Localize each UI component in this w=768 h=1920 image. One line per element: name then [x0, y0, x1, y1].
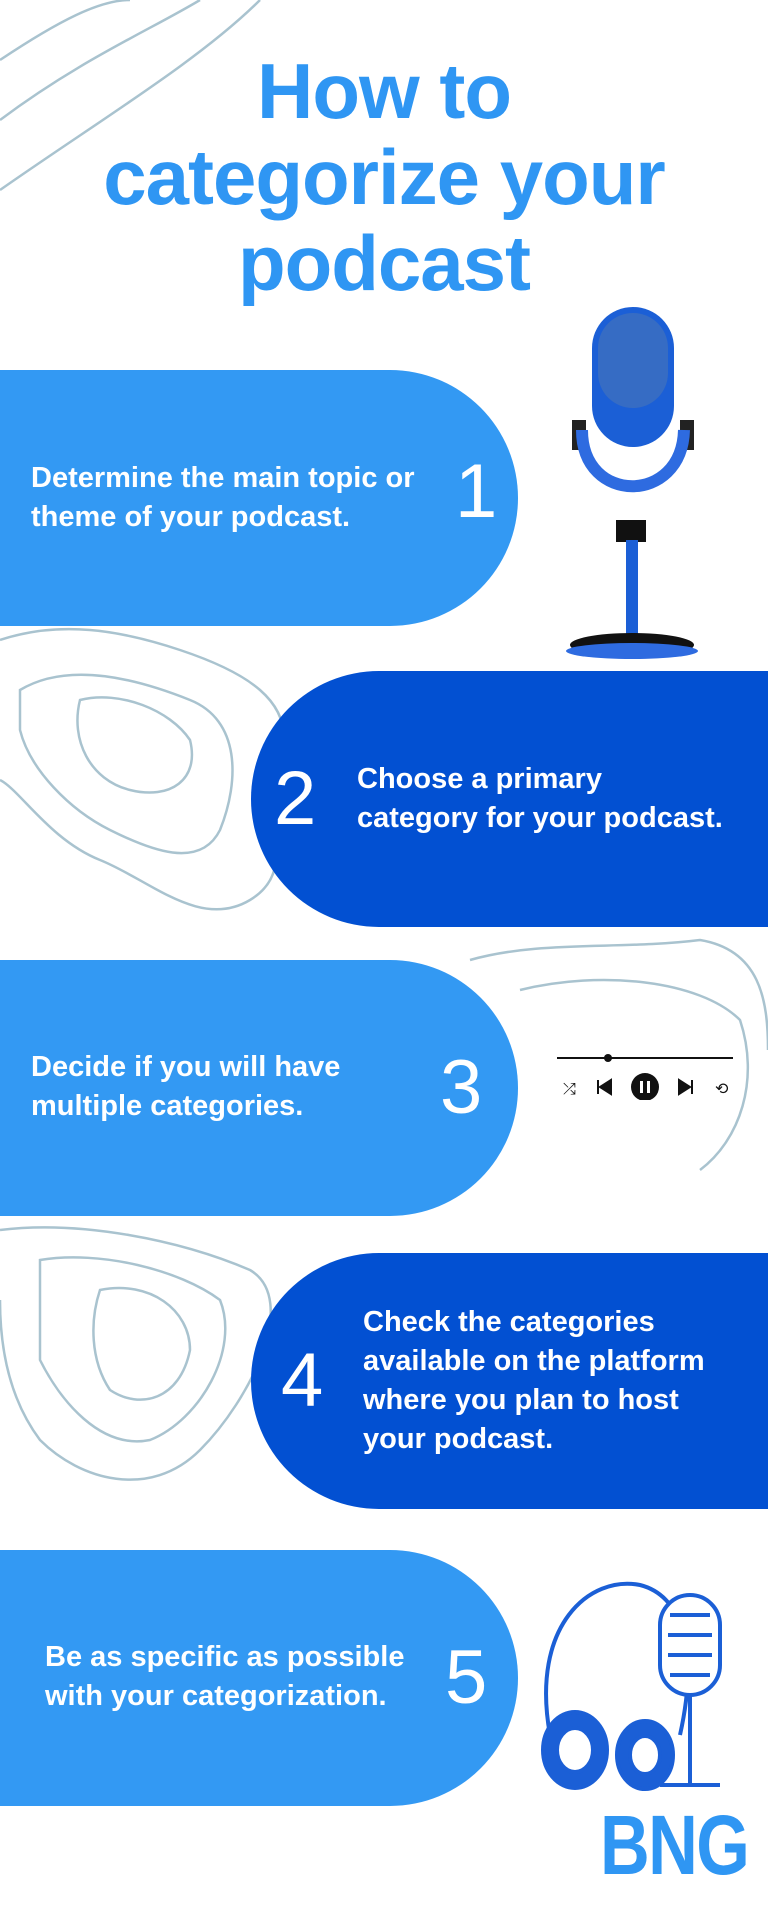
panel: step 3: 3	[440, 1045, 482, 1130]
panel: step 5	[0, 1550, 518, 1806]
panel: step 5: with your categorization.	[45, 1680, 387, 1712]
title: categorize your	[103, 133, 665, 221]
panel: step 4: available on the platform	[363, 1345, 705, 1377]
panel: step 4	[251, 1253, 768, 1509]
icon: headphones and microphone	[541, 1582, 722, 1791]
panel: step 1: 1	[455, 449, 497, 534]
panel: step 2	[251, 671, 768, 927]
panel: step 1	[0, 370, 518, 626]
panel: step 2: Choose a primary	[357, 763, 602, 795]
icon: microphone	[566, 307, 698, 659]
icon: audio player	[557, 1054, 733, 1100]
panel: step 4: where you plan to host	[363, 1384, 679, 1416]
panel: step 1: Determine the main topic or	[31, 462, 415, 494]
title: podcast	[238, 219, 530, 307]
title	[103, 47, 665, 307]
icon: audio player: ⟲	[715, 1081, 729, 1098]
title: How to	[257, 47, 511, 135]
panel: step 3: Decide if you will have	[31, 1051, 340, 1083]
panel: step 5: 5	[445, 1635, 487, 1720]
logo: BNG: BNG	[600, 1798, 748, 1892]
panel: step 3	[0, 960, 518, 1216]
icon: audio player: ⤮	[563, 1081, 576, 1098]
panel: step 3: multiple categories.	[31, 1090, 303, 1122]
panel: step 1: theme of your podcast.	[31, 501, 350, 533]
panel: step 2: category for your podcast.	[357, 802, 723, 834]
panel: step 4: 4	[281, 1338, 323, 1423]
panel: step 2: 2	[274, 756, 316, 841]
panel: step 4: Check the categories	[363, 1306, 655, 1338]
panel: step 5: Be as specific as possible	[45, 1641, 404, 1673]
panel: step 4: your podcast.	[363, 1423, 553, 1455]
